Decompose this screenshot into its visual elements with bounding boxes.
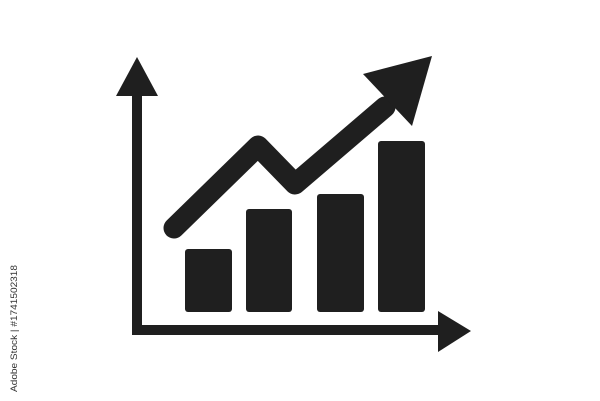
id text: Adobe Stock | #1741502318	[9, 265, 20, 392]
y axis arrow	[116, 57, 158, 335]
bars	[185, 141, 425, 312]
trend arrow	[174, 56, 432, 228]
x axis arrow	[132, 311, 471, 352]
